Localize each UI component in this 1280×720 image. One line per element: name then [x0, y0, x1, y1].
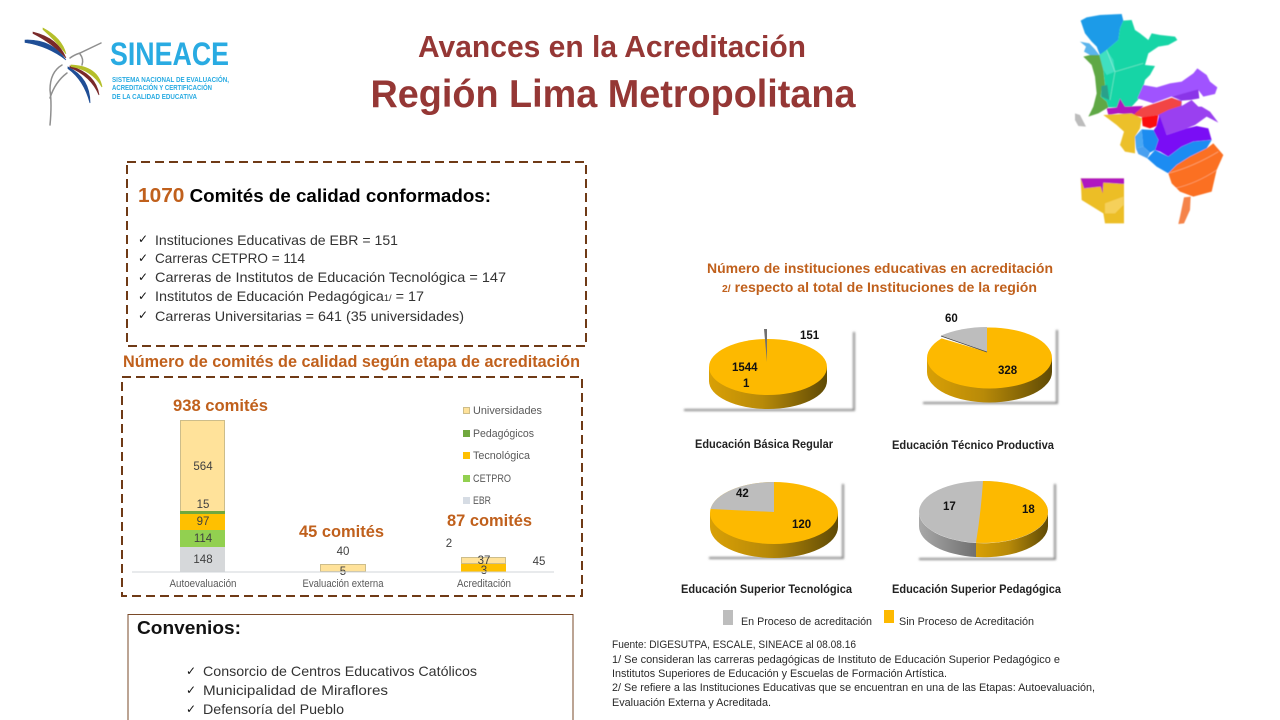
list: comités por tipo: ✓ [138, 289, 148, 303]
source notes: Evaluación Externa y Acreditada. [612, 697, 771, 709]
list: convenios [186, 663, 477, 717]
bar: Acreditación: 37 [478, 555, 490, 567]
list: comités por tipo: ✓ [138, 232, 148, 246]
pie: Educación Técnico Productiva: 60 [945, 313, 958, 325]
list: convenios: ✓ [186, 664, 196, 678]
panel: convenios [128, 614, 573, 720]
pie: Educación Superior Tecnológica [709, 482, 843, 558]
heading: instituciones en acreditación: Número de instituciones educativas en acreditación [707, 261, 1053, 276]
source notes: 2/ Se refiere a las Instituciones Educativas que se encuentran en una de las Etapas: Autoevaluación, [612, 682, 1095, 694]
list: comités por tipo: Carreras Universitarias = 641 (35 universidades) [155, 308, 464, 324]
list: convenios: Municipalidad de Miraflores [203, 682, 388, 698]
axis labels: Autoevaluación [170, 578, 236, 590]
heading: convenios: Convenios: [137, 618, 241, 638]
list: comités por tipo: ✓ [138, 308, 148, 322]
bar: Autoevaluación [180, 420, 225, 572]
legend: EBR [473, 495, 491, 507]
legend [463, 405, 542, 507]
legend: Universidades [473, 405, 542, 417]
list: convenios: Consorcio de Centros Educativos Católicos [203, 663, 477, 679]
list: convenios: ✓ [186, 702, 196, 716]
totals: 87 comités [447, 511, 532, 530]
legend: pies: Sin Proceso de Acreditación [899, 616, 1034, 628]
pie: Educación Técnico Productiva: 328 [998, 365, 1018, 377]
logo subtitle [112, 75, 229, 101]
source notes: Fuente: DIGESUTPA, ESCALE, SINEACE al 08.08.16 [612, 639, 856, 651]
caption: ETP: Educación Técnico Productiva [892, 440, 1055, 452]
totals: 938 comités [173, 396, 268, 415]
logo: SINEACE [25, 28, 229, 125]
pie: Educación Básica Regular [684, 329, 854, 410]
pie: Educación Básica Regular: 1544 [732, 362, 758, 374]
bar: Evaluación externa [320, 546, 366, 578]
list: comités por tipo: Instituciones Educativas de EBR = 151 [155, 232, 398, 248]
panel: bar chart comités por etapa [122, 377, 582, 596]
map: Lima Metropolitana districts [1075, 14, 1223, 224]
list: comités por tipo: ✓ [138, 251, 148, 265]
map inset [1081, 178, 1124, 223]
title: Región Lima Metropolitana [370, 73, 856, 116]
pie: Educación Superior Pedagógica: 18 [1022, 504, 1035, 516]
pie: Educación Superior Pedagógica [919, 481, 1055, 559]
logo subtitle: DE LA CALIDAD EDUCATIVA [112, 92, 197, 101]
bar: Acreditación: 45 [533, 556, 545, 568]
bar: Evaluación externa: 5 [340, 566, 346, 578]
legend: pies [723, 610, 1034, 628]
icon: hummingbird [25, 28, 102, 125]
totals: 45 comités [299, 522, 384, 541]
pie: Educación Superior Tecnológica: 120 [792, 519, 811, 531]
pie: Educación Básica Regular: 1 [743, 378, 750, 390]
legend: Tecnológica [473, 450, 531, 462]
totals [173, 396, 532, 541]
caption: ESP: Educación Superior Pedagógica [892, 584, 1062, 596]
list: comités por tipo: ✓ [138, 270, 148, 284]
pie: Educación Superior Tecnológica: 42 [736, 488, 749, 500]
axis labels [170, 578, 511, 590]
heading: 1070 comités: 1070 Comités de calidad conformados: [138, 185, 491, 207]
list: comités por tipo: Carreras de Institutos de Educación Tecnológica = 147 [155, 269, 506, 285]
title: Avances en la Acreditación [418, 29, 806, 64]
pie: Educación Superior Pedagógica: 17 [943, 501, 956, 513]
bar: Acreditación [446, 538, 545, 577]
axis labels: Acreditación [457, 578, 511, 590]
title [370, 29, 856, 116]
heading: comités según etapa: Número de comités de calidad según etapa de acreditación [123, 352, 580, 371]
caption: EST: Educación Superior Tecnológica [681, 584, 853, 596]
heading: instituciones en acreditación [707, 261, 1053, 295]
list: comités por tipo [138, 232, 506, 324]
list: convenios: ✓ [186, 683, 196, 697]
bar: Acreditación: 2 [446, 538, 452, 550]
source notes [612, 639, 1095, 709]
bar: Autoevaluación: 564 [193, 461, 213, 473]
bar: Acreditación: 3 [481, 565, 487, 577]
pie: Educación Básica Regular: 151 [800, 330, 820, 342]
bar: Autoevaluación: 97 [197, 516, 209, 528]
pie: Educación Técnico Productiva [923, 313, 1057, 403]
list: comités por tipo: Institutos de Educación Pedagógica 1/ = 17 [155, 288, 424, 304]
source notes: 1/ Se consideran las carreras pedagógicas de Instituto de Educación Superior Pedagógico e [612, 654, 1060, 666]
legend: pies: En Proceso de acreditación [741, 616, 872, 628]
logo wordmark: SINEACE [110, 36, 229, 72]
panel: comités de calidad conformados [127, 162, 586, 346]
legend: Pedagógicos [473, 428, 534, 440]
source notes: Institutos Superiores de Educación y Escuelas de Formación Artística. [612, 668, 947, 680]
axis labels: Evaluación externa [302, 578, 384, 590]
heading: instituciones en acreditación: 2/ respecto al total de Instituciones de la región [722, 280, 1037, 295]
bar: Autoevaluación: 114 [194, 533, 213, 545]
list: convenios: Defensoría del Pueblo [203, 701, 344, 717]
list: comités por tipo: Carreras CETPRO = 114 [155, 250, 305, 266]
caption: EBR: Educación Básica Regular [695, 439, 833, 451]
bar: Autoevaluación: 15 [197, 499, 209, 511]
logo subtitle: ACREDITACIÓN Y CERTIFICACIÓN [112, 83, 212, 92]
legend: CETPRO [473, 473, 511, 485]
logo subtitle: SISTEMA NACIONAL DE EVALUACIÓN, [112, 75, 229, 84]
bar: Autoevaluación: 148 [193, 554, 213, 566]
bar: Evaluación externa: 40 [337, 546, 349, 558]
